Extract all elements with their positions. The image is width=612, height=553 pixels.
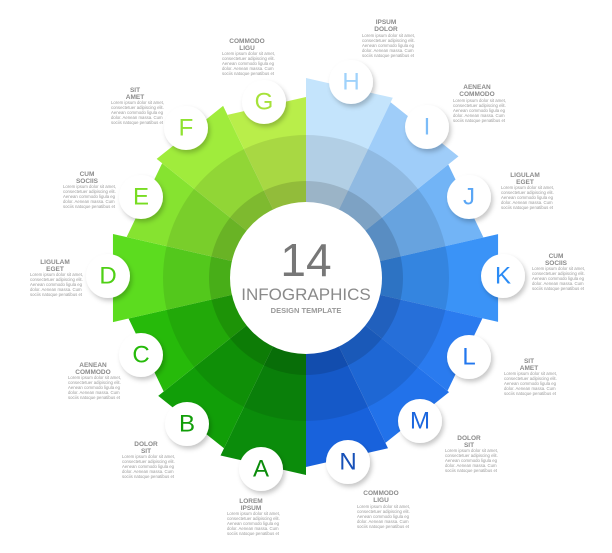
text block H: IPSUM [376,19,396,26]
text block I [453,84,506,123]
wheel chart [94,78,517,484]
letters: F [179,114,193,142]
letters: I [424,114,430,140]
wedge F [157,94,358,278]
text block N: LIGU [373,497,389,504]
title: 14: 14 [280,234,332,286]
wedge D [94,194,306,322]
text block K: CUM [549,253,563,260]
wedge N [232,278,388,484]
text block E [63,171,116,209]
text block B: SIT [141,448,151,455]
text block K [532,253,585,291]
letters: K [495,262,511,290]
wedge A [221,278,306,475]
text block C [68,362,121,400]
text block F: SIT [130,87,140,94]
letters: M [410,408,430,434]
text block F [111,87,164,125]
wedge J [306,165,498,340]
text block A: IPSUM [241,505,261,512]
letters: A [253,456,269,482]
letters: D [99,262,117,290]
wedge B [150,242,306,448]
text block G [222,38,275,76]
letters: C [132,342,150,368]
text block M: SIT [464,442,474,449]
text block D [30,259,83,297]
wedge K [306,234,517,361]
text block D: EGET [46,266,64,273]
wedge M [256,278,449,454]
text block L: SIT [524,358,534,365]
letters [99,68,511,482]
text block K: SOCIIS [545,260,568,267]
text block C: AENEAN [79,362,107,369]
text block C: COMMODO [75,369,111,376]
text block M: DOLOR [457,435,481,442]
text block N: COMMODO [363,490,399,497]
text block N [357,490,410,529]
letters: G [255,88,273,116]
letters: B [179,410,195,438]
text block G: COMMODO [229,38,265,45]
text block E: SOCIIS [76,178,99,185]
wedge E [127,159,324,278]
subtitle: DESIGN TEMPLATE [271,306,341,315]
text block L: AMET [520,365,538,372]
letters: N [339,448,357,476]
title: infographics: INFOGRAPHICS [241,285,371,304]
letters: J [463,184,475,210]
text block I: COMMODO [459,91,495,98]
letters: E [133,184,149,210]
wedge H [306,78,393,278]
text block H [362,19,415,58]
text block L [504,358,557,396]
center circle [230,202,382,354]
text block H: DOLOR [374,26,398,33]
wedge G [227,81,377,278]
text block D: LIGULAM [40,259,70,266]
wedge I [306,102,467,315]
text block B: DOLOR [134,441,158,448]
text block J [501,172,554,210]
letter badges [86,60,525,491]
text block I: AENEAN [463,84,491,91]
text block A [227,498,280,536]
text block J: LIGULAM [510,172,540,179]
letters: H [342,68,360,96]
text block J: EGET [516,179,534,186]
text block A: LOREM [239,498,263,505]
text block B [122,441,175,479]
text block G: LIGU [239,45,255,52]
text block F: AMET [126,94,144,101]
text block M [445,435,498,473]
text block E: CUM [80,171,94,178]
wedge L [289,278,482,395]
letters: L [462,344,476,370]
wedge C [114,216,306,391]
